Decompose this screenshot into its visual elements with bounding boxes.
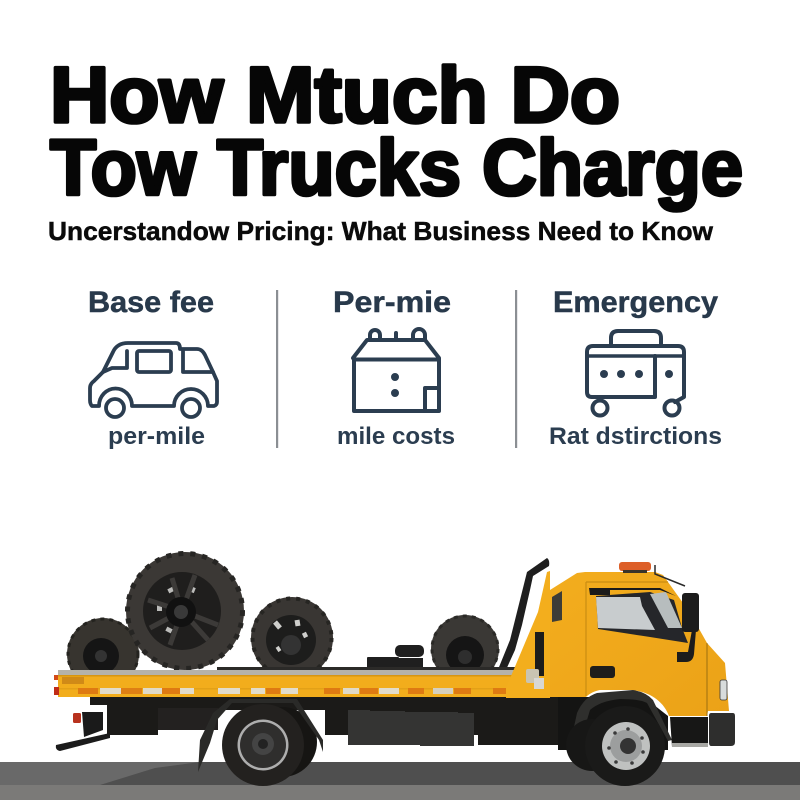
window xyxy=(596,592,688,643)
headboard xyxy=(506,571,550,698)
reflector strip xyxy=(78,688,530,694)
caption: per-mile: per-mile xyxy=(108,423,205,450)
title: Tow Trucks Charge xyxy=(50,122,743,212)
door handle xyxy=(590,666,615,678)
front wheel xyxy=(566,706,665,786)
truck cab xyxy=(550,562,735,786)
subtitle: Uncerstandow Pricing: What Business Need to Know xyxy=(48,216,714,246)
tail step xyxy=(56,733,110,751)
divider xyxy=(515,290,517,448)
tire: small left xyxy=(66,618,140,670)
tires on flatbed xyxy=(66,551,500,670)
tow truck illustration xyxy=(54,552,735,786)
divider xyxy=(276,290,278,448)
tire: right xyxy=(430,614,500,667)
icon: van xyxy=(90,343,217,417)
tire: large xyxy=(126,552,244,670)
fender xyxy=(569,690,672,750)
wheel well xyxy=(558,694,668,750)
heading: base fee: Base fee xyxy=(88,286,214,319)
cab body xyxy=(550,572,729,716)
fuel tanks xyxy=(348,710,474,746)
title xyxy=(50,50,743,212)
tire: medium xyxy=(250,596,334,667)
caption: rate distinctions: Rat dstirctions xyxy=(549,423,722,450)
flatbed deck xyxy=(54,667,530,697)
lower step xyxy=(670,717,708,747)
heading: emergency: Emergency xyxy=(553,286,718,319)
rear wheel xyxy=(198,699,323,786)
roof beacon xyxy=(619,562,651,573)
panel: per-mile xyxy=(333,286,455,450)
rear fender xyxy=(198,699,323,772)
panel: emergency xyxy=(549,286,722,450)
mirror xyxy=(677,593,699,662)
chassis xyxy=(90,697,560,745)
lift arm xyxy=(497,558,549,672)
heading: per-mile: Per-mie xyxy=(333,286,451,319)
rear cab window xyxy=(552,591,562,622)
panel: base fee xyxy=(88,286,217,450)
caption: mile costs: mile costs xyxy=(337,423,455,450)
headlight xyxy=(720,680,727,700)
title: How Mtuch Do xyxy=(50,50,620,139)
icon: calendar xyxy=(353,329,439,411)
ground xyxy=(0,762,800,800)
bumper xyxy=(709,713,735,746)
icon: service cart xyxy=(587,331,684,416)
stacked black blocks xyxy=(367,645,424,667)
